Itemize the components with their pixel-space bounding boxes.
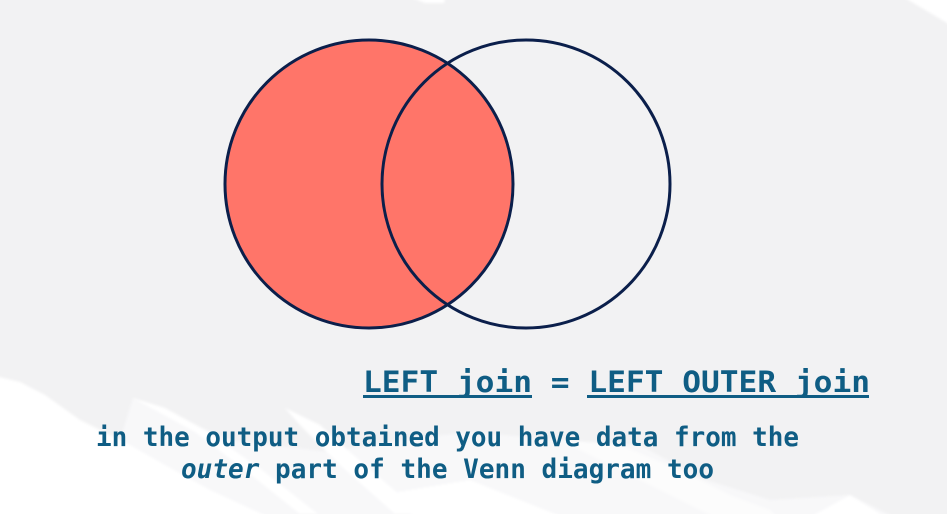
explanation text: outer part of the Venn diagram too (181, 454, 714, 485)
heading: left join equals left outer join: LEFT join = LEFT OUTER join (363, 365, 870, 399)
explanation text: in the output obtained you have data from the (96, 422, 799, 453)
right circle: outline (382, 40, 670, 328)
venn diagram (225, 40, 670, 328)
left circle: filled (225, 40, 513, 328)
explanation text (96, 422, 799, 485)
